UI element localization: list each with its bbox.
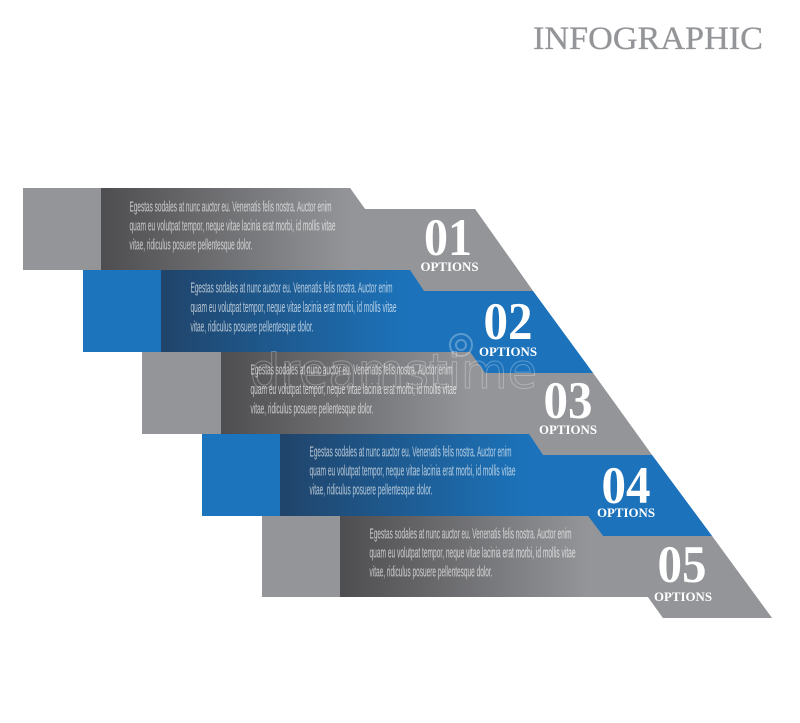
panel: option 01: quam eu volutpat tempor, neque vitae lacinia erat morbi, id mollis vitae (130, 218, 336, 234)
watermark: dreamstime (250, 344, 537, 400)
panel: option 01 (23, 188, 533, 291)
title: INFOGRAPHIC (533, 21, 763, 57)
panel: option 04: quam eu volutpat tempor, neque vitae lacinia erat morbi, id mollis vitae (310, 464, 516, 480)
text block 02 (190, 280, 396, 336)
options label 03: OPTIONS (539, 422, 597, 437)
text block 04 (310, 444, 516, 498)
panel: option 04 (202, 434, 712, 536)
text block 03 (250, 362, 456, 418)
text block 05: vitae, ridiculus posuere pellentesque dolor. (370, 564, 492, 580)
text block 02: vitae, ridiculus posuere pellentesque dolor. (190, 320, 314, 336)
number 04: 04 (602, 457, 650, 515)
number 03: 03 (544, 372, 592, 430)
options label 04: OPTIONS (597, 505, 655, 520)
options label 02: OPTIONS (479, 344, 537, 359)
options label 01: OPTIONS (420, 259, 478, 274)
number 02: 02 (484, 293, 532, 351)
panel: option 02: quam eu volutpat tempor, neque vitae lacinia erat morbi, id mollis vitae (190, 300, 396, 316)
panel: option 04: Egestas sodales at nunc auctor eu. Venenatis felis nostra. Auctor enim (310, 444, 512, 460)
panel: option 03: quam eu volutpat tempor, neque vitae lacinia erat morbi, id mollis vitae (250, 382, 456, 398)
panel: option 05 (262, 516, 772, 618)
text block 05 (370, 526, 576, 580)
panel: option 02: Egestas sodales at nunc auctor eu. Venenatis felis nostra. Auctor enim (190, 280, 392, 296)
panel: option 02 (83, 270, 593, 373)
panel: option 03: Egestas sodales at nunc auctor eu. Venenatis felis nostra. Auctor enim (250, 362, 452, 378)
panel: option 01: Egestas sodales at nunc auctor eu. Venenatis felis nostra. Auctor enim (130, 200, 332, 216)
number 01: 01 (424, 209, 472, 267)
panel: option 03 (142, 352, 652, 455)
number 05: 05 (658, 536, 706, 594)
text block 01 (130, 200, 336, 254)
options label 05: OPTIONS (654, 589, 712, 604)
text block 03: vitae, ridiculus posuere pellentesque dolor. (250, 402, 374, 418)
text block 04: vitae, ridiculus posuere pellentesque dolor. (310, 482, 432, 498)
text block 01: vitae, ridiculus posuere pellentesque dolor. (130, 238, 252, 254)
